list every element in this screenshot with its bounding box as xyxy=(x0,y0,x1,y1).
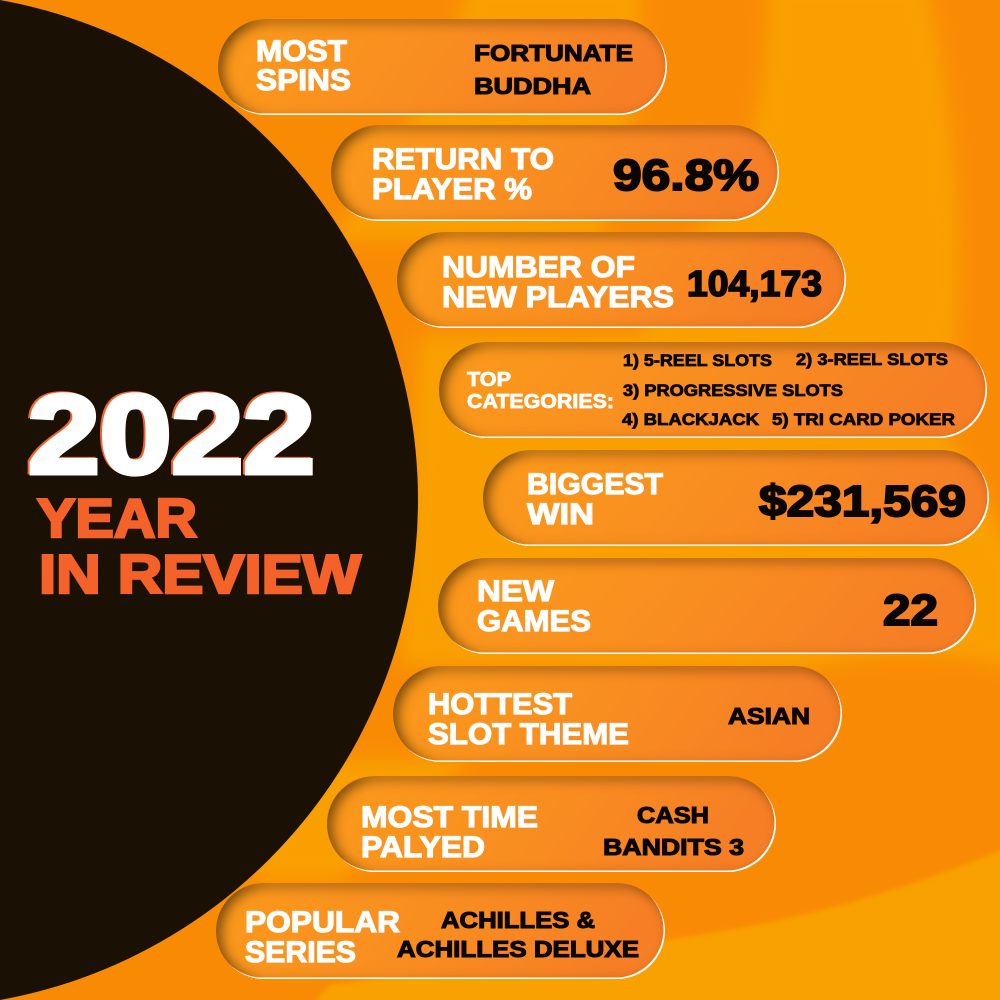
panel: biggest win xyxy=(483,450,989,546)
panel: most time played: PALYED xyxy=(361,831,485,864)
title: 2022: 2022 xyxy=(28,372,315,497)
panel: popular series: POPULAR xyxy=(245,906,400,939)
panel: most spins: BUDDHA xyxy=(474,73,591,99)
panel: most time played xyxy=(327,776,776,872)
panel: top categories: CATEGORIES: xyxy=(467,391,614,413)
panel: new players: NEW PLAYERS xyxy=(442,281,674,314)
panel: hottest slot theme: ASIAN xyxy=(728,703,810,729)
panel: return to player xyxy=(331,125,779,221)
panel: popular series: SERIES xyxy=(245,936,356,969)
panel: top categories: 3) PROGRESSIVE SLOTS xyxy=(623,381,843,400)
panel: return to player: 96.8% xyxy=(613,151,759,200)
panel: new players: NUMBER OF xyxy=(442,251,635,284)
panel: popular series xyxy=(216,883,665,979)
panel: most time played: BANDITS 3 xyxy=(603,834,744,860)
panel: hottest slot theme: SLOT THEME xyxy=(428,718,629,751)
panel: most spins: MOST xyxy=(256,35,347,68)
panel: most spins xyxy=(218,19,667,115)
panel: most time played: MOST TIME xyxy=(361,801,538,834)
panel: new games: GAMES xyxy=(477,605,591,638)
panel: top categories: 5) TRI CARD POKER xyxy=(772,410,955,429)
panel: new players xyxy=(397,232,846,328)
dark semicircle panel xyxy=(0,0,418,1000)
panel: most time played: CASH xyxy=(637,802,709,828)
panel: new games xyxy=(438,558,976,654)
subtitle: year in review: YEAR xyxy=(37,487,197,549)
panel: return to player: RETURN TO xyxy=(372,143,554,176)
subtitle: year in review xyxy=(37,487,361,605)
panel: top categories: 1) 5-REEL SLOTS xyxy=(623,351,772,370)
panel: biggest win: WIN xyxy=(527,498,594,531)
panel: biggest win: BIGGEST xyxy=(527,468,663,501)
panel: hottest slot theme: HOTTEST xyxy=(428,688,572,721)
panel: top categories: 4) BLACKJACK xyxy=(622,410,760,429)
panel: most spins: FORTUNATE xyxy=(474,40,633,66)
panel: popular series: ACHILLES DELUXE xyxy=(397,936,639,962)
panel: biggest win: $231,569 xyxy=(759,477,966,526)
panel: most spins: SPINS xyxy=(256,64,351,97)
panel: popular series: ACHILLES & xyxy=(441,907,595,933)
panel: top categories: 2) 3-REEL SLOTS xyxy=(796,350,948,369)
panel: return to player: PLAYER % xyxy=(372,173,532,206)
subtitle: year in review: IN REVIEW xyxy=(39,543,361,605)
panel: new games: NEW xyxy=(477,575,555,608)
panel: new games: 22 xyxy=(883,586,938,635)
title: 2022: 2022 xyxy=(26,371,313,496)
panel: top categories: TOP xyxy=(467,369,511,391)
panel: new players: 104,173 xyxy=(687,263,822,304)
panel: hottest slot theme xyxy=(393,666,842,762)
panel: top categories xyxy=(439,342,987,438)
